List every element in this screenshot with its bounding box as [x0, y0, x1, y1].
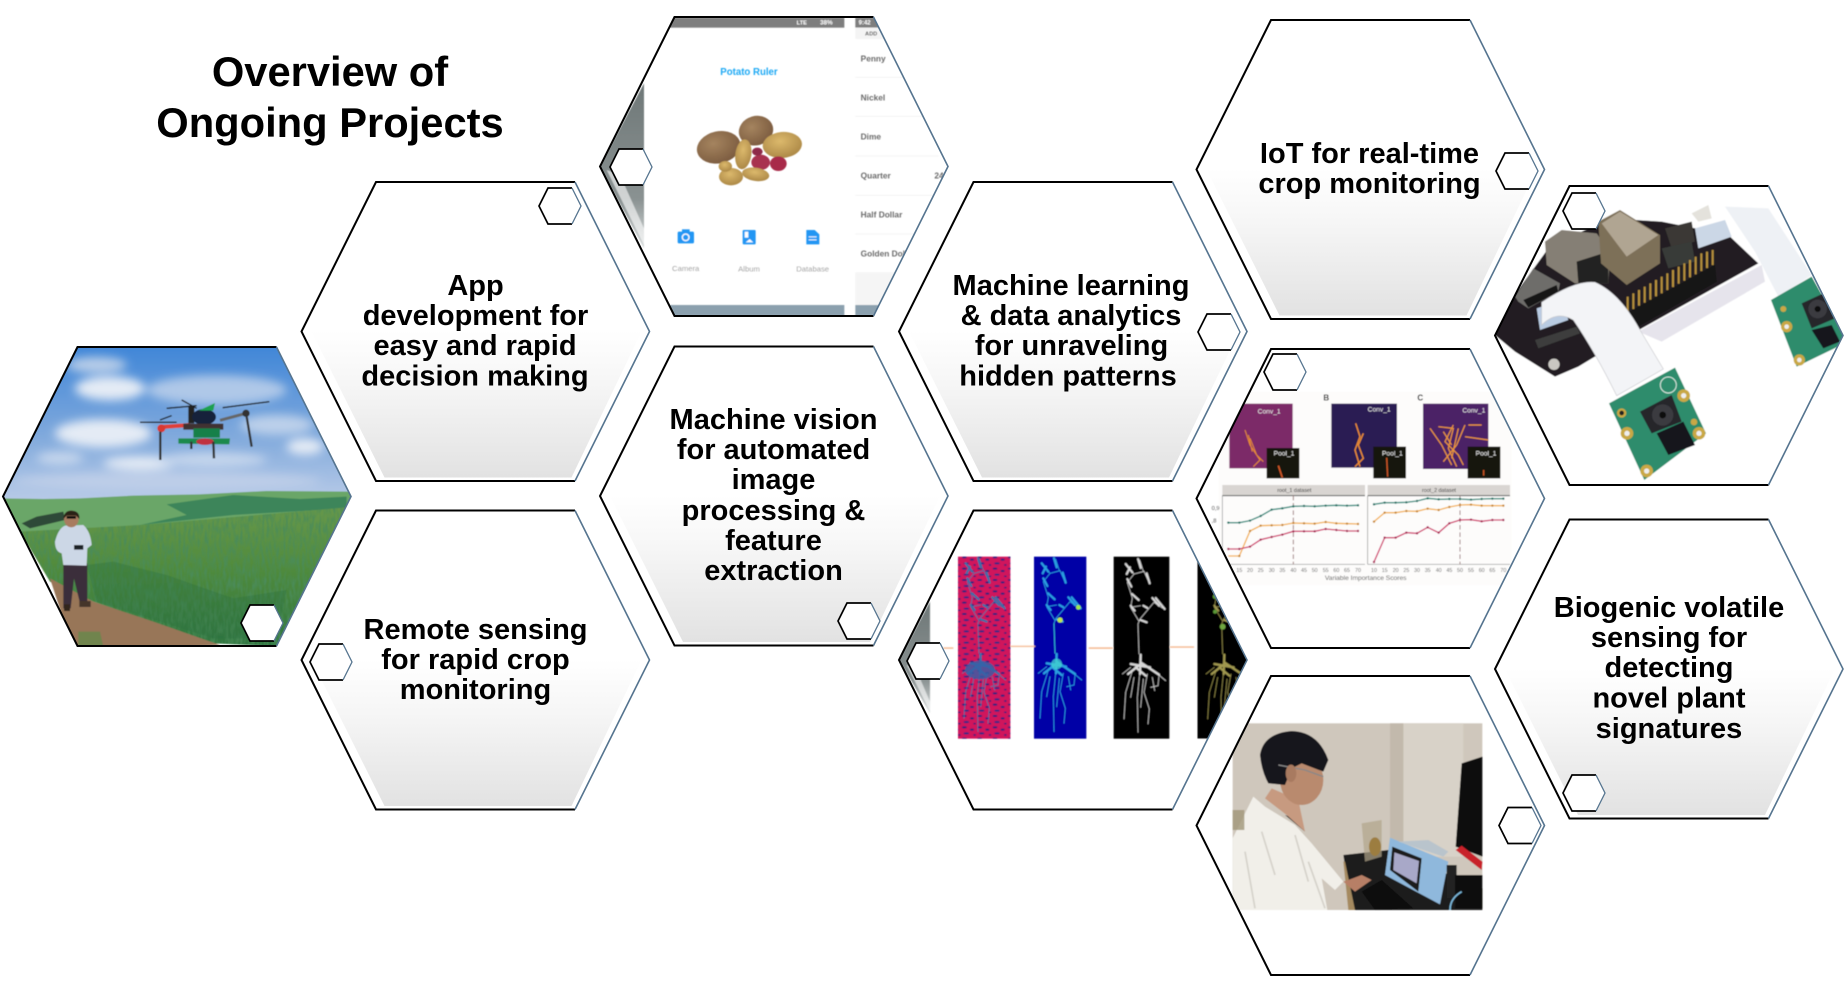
text: iot — [1258, 138, 1481, 200]
ethernet — [1598, 210, 1660, 285]
panel: colour mask — [1198, 557, 1253, 739]
text: app development — [361, 270, 589, 392]
figure: feature maps and line charts: B — [1323, 394, 1329, 403]
wheat field — [20, 507, 355, 650]
text: machine vision: for automated — [677, 434, 870, 466]
panel: machine vision — [600, 346, 948, 646]
jar — [1362, 820, 1382, 862]
chart: root_2 dataset: 30 — [1414, 568, 1420, 574]
heatmap A: Pool_1 — [1274, 451, 1295, 458]
chart: root_1 dataset: 50 — [1312, 568, 1318, 574]
lab coat — [1233, 797, 1343, 910]
coin list: Dime — [861, 131, 881, 141]
panel: potato ruler app screenshot — [600, 17, 948, 316]
chart: root_1 dataset: 70 — [1355, 568, 1361, 574]
photo: researcher with instrument — [1233, 723, 1482, 910]
text: machine learning: for unraveling — [975, 330, 1168, 362]
heatmap C: Conv_1 — [1462, 408, 1486, 415]
chart: root_2 dataset: root_2 dataset — [1422, 488, 1457, 494]
text: machine vision — [670, 404, 877, 587]
figure: feature maps and line charts: Variable Importance Scores — [1325, 575, 1407, 582]
screenshot: potato ruler: LTE — [797, 20, 807, 26]
text: machine learning: hidden patterns — [959, 360, 1177, 392]
chart: root_1 dataset: 0,9 — [1212, 506, 1220, 512]
camera rear — [1771, 277, 1846, 367]
text: biogenic volatile: detecting — [1605, 652, 1733, 684]
icon: small hexagon — [1563, 193, 1605, 229]
screenshot: potato ruler — [600, 18, 944, 316]
heatmap C — [1423, 404, 1500, 478]
text: machine vision: feature — [725, 525, 822, 557]
photo: drone over wheat field — [0, 345, 355, 650]
text: biogenic volatile — [1554, 592, 1784, 745]
near-side connector — [1535, 327, 1580, 348]
icon: database — [806, 230, 819, 244]
coin list: 24 — [934, 170, 944, 180]
panel: binary mask — [1114, 557, 1169, 739]
chart: root_1 dataset: 60 — [1333, 568, 1339, 574]
chart: root_2 dataset: 60 — [1479, 568, 1485, 574]
text: machine vision: extraction — [704, 555, 843, 587]
text: remote sensing: Remote sensing — [364, 614, 588, 646]
top connector — [1695, 220, 1732, 248]
panel: biogenic volatile sensing — [1495, 520, 1843, 818]
clouds — [13, 357, 323, 491]
chart: root_1 dataset: 25 — [1258, 568, 1264, 574]
chart: root_2 dataset: 55 — [1468, 568, 1474, 574]
text: machine learning — [953, 270, 1189, 392]
text: remote sensing: for rapid crop — [381, 644, 570, 676]
chart: root_1 dataset: ,8 — [1212, 518, 1216, 524]
pin header — [1627, 265, 1717, 327]
text: machine vision: processing & — [682, 495, 865, 527]
chart: root_2 dataset: 70 — [1500, 568, 1506, 574]
nav labels: Database — [796, 264, 829, 273]
text: machine vision: Machine vision — [670, 404, 877, 436]
head — [1280, 762, 1324, 806]
panel: lab photo — [1196, 676, 1544, 975]
heatmap B — [1331, 404, 1406, 478]
chart: root_2 dataset: 10 — [1371, 568, 1377, 574]
text: biogenic volatile: sensing for — [1591, 622, 1747, 654]
panel: iot — [1196, 20, 1544, 319]
photo: board with cameras — [1495, 185, 1846, 490]
app title: Potato Ruler — [720, 67, 778, 78]
panel: remote sensing — [302, 510, 650, 810]
text: app development: App — [447, 270, 504, 302]
panel: root image processing pipeline — [899, 510, 1253, 810]
hills — [0, 491, 355, 545]
person — [55, 511, 92, 611]
board — [1495, 218, 1758, 377]
title: Overview of — [212, 48, 448, 95]
chart: root_1 dataset: 40 — [1290, 568, 1296, 574]
image: root segmentation panels — [899, 557, 1253, 739]
coin list: Golden Dollar — [861, 248, 916, 258]
chart: root_1 dataset: 45 — [1301, 568, 1307, 574]
chart: root_2 dataset: 50 — [1457, 568, 1463, 574]
nav labels — [672, 266, 829, 272]
nav labels: Album — [738, 264, 760, 273]
USB — [1545, 230, 1610, 283]
icon: small hexagon — [610, 149, 652, 185]
chart: root_2 dataset: 15 — [1382, 568, 1388, 574]
heatmap C: Pool_1 — [1476, 450, 1497, 457]
text: biogenic volatile: Biogenic volatile — [1554, 592, 1784, 624]
panel: pseudo-colour magenta — [958, 557, 1010, 739]
chips — [1665, 222, 1695, 248]
panel: single-board computer photo — [1495, 185, 1846, 490]
chart: root_1 dataset — [1212, 485, 1365, 574]
coin list: Quarter — [861, 170, 892, 180]
hand — [1343, 875, 1372, 892]
heatmap A — [1229, 404, 1299, 478]
chart: root_2 dataset: 65 — [1489, 568, 1495, 574]
chart: root_2 dataset: 20 — [1393, 568, 1399, 574]
chart: root_1 dataset: 15 — [1236, 568, 1242, 574]
chart: root_2 dataset — [1368, 485, 1510, 574]
coin list: Penny — [861, 53, 886, 63]
chart: root_1 dataset: 35 — [1279, 568, 1285, 574]
icon: small hexagon — [1563, 775, 1605, 811]
dirt path — [50, 578, 220, 650]
nav labels: Camera — [672, 264, 700, 273]
icon: camera — [678, 229, 694, 243]
mounting hole — [1548, 359, 1560, 370]
panel: machine learning — [899, 182, 1247, 481]
heatmap B: Pool_1 — [1382, 450, 1403, 457]
icon: small hexagon — [539, 188, 581, 224]
icon: small hexagon — [1499, 808, 1541, 844]
panel: blue heatmap — [1034, 557, 1086, 739]
text: app development: development for — [363, 300, 588, 332]
chart: root_1 dataset: 20 — [1247, 568, 1253, 574]
text: biogenic volatile: novel plant — [1592, 682, 1746, 714]
icon: small hexagon — [1198, 314, 1240, 350]
figure: feature maps and line charts: C — [1417, 394, 1423, 403]
text: remote sensing — [364, 614, 588, 706]
text: machine learning: Machine learning — [953, 270, 1189, 302]
ribbon cable — [1542, 282, 1663, 396]
chart: root_2 dataset: 40 — [1436, 568, 1442, 574]
text: iot: IoT for real-time — [1260, 138, 1479, 170]
text: machine vision: image — [732, 464, 815, 496]
drone — [140, 400, 269, 460]
coin list: Half Dollar — [861, 209, 903, 219]
text: iot: crop monitoring — [1258, 168, 1481, 200]
coin list: Nickel — [861, 92, 885, 102]
icon: album — [743, 230, 756, 244]
chart: root_2 dataset: 35 — [1425, 568, 1431, 574]
figure: feature maps and line charts — [1212, 392, 1512, 585]
text: machine learning: & data analytics — [961, 300, 1181, 332]
panel: deep learning chart — [1196, 349, 1544, 648]
chart: root_1 dataset: 65 — [1344, 568, 1350, 574]
panel: remote sensing drone photo — [0, 345, 355, 650]
heatmap A: Conv_1 — [1258, 409, 1281, 416]
text: biogenic volatile: signatures — [1596, 713, 1742, 745]
HDMI — [1515, 268, 1560, 308]
keyboard — [1362, 880, 1413, 910]
icon: small hexagon — [241, 605, 283, 641]
chart: root_2 dataset: 25 — [1403, 568, 1409, 574]
chart: root_2 dataset: 45 — [1446, 568, 1452, 574]
chart: root_1 dataset: 55 — [1323, 568, 1329, 574]
icon: small hexagon — [907, 643, 949, 679]
chart: root_1 dataset: 30 — [1269, 568, 1275, 574]
screenshot: potato ruler: ADD — [865, 31, 877, 37]
icon: small hexagon — [838, 603, 880, 639]
coin list — [861, 53, 944, 258]
potatoes — [694, 112, 803, 185]
screenshot: potato ruler: 9:42 — [859, 20, 871, 26]
icon: small hexagon — [1264, 354, 1306, 390]
red box and devices — [1456, 846, 1482, 870]
panel: app development — [302, 182, 650, 481]
text: app development: easy and rapid — [373, 330, 577, 362]
title: Ongoing Projects — [156, 99, 504, 146]
instrument — [1385, 838, 1448, 904]
text: remote sensing: monitoring — [400, 674, 551, 706]
icon: small hexagon — [310, 644, 352, 680]
chart: root_1 dataset: root_1 dataset — [1277, 488, 1312, 494]
icon: small hexagon — [1496, 153, 1538, 189]
camera front — [1609, 368, 1706, 480]
arrows — [943, 646, 1194, 648]
title — [156, 48, 504, 146]
heatmap B: Conv_1 — [1368, 407, 1391, 414]
screenshot: potato ruler: 38% — [820, 20, 833, 27]
text: app development: decision making — [361, 360, 589, 392]
